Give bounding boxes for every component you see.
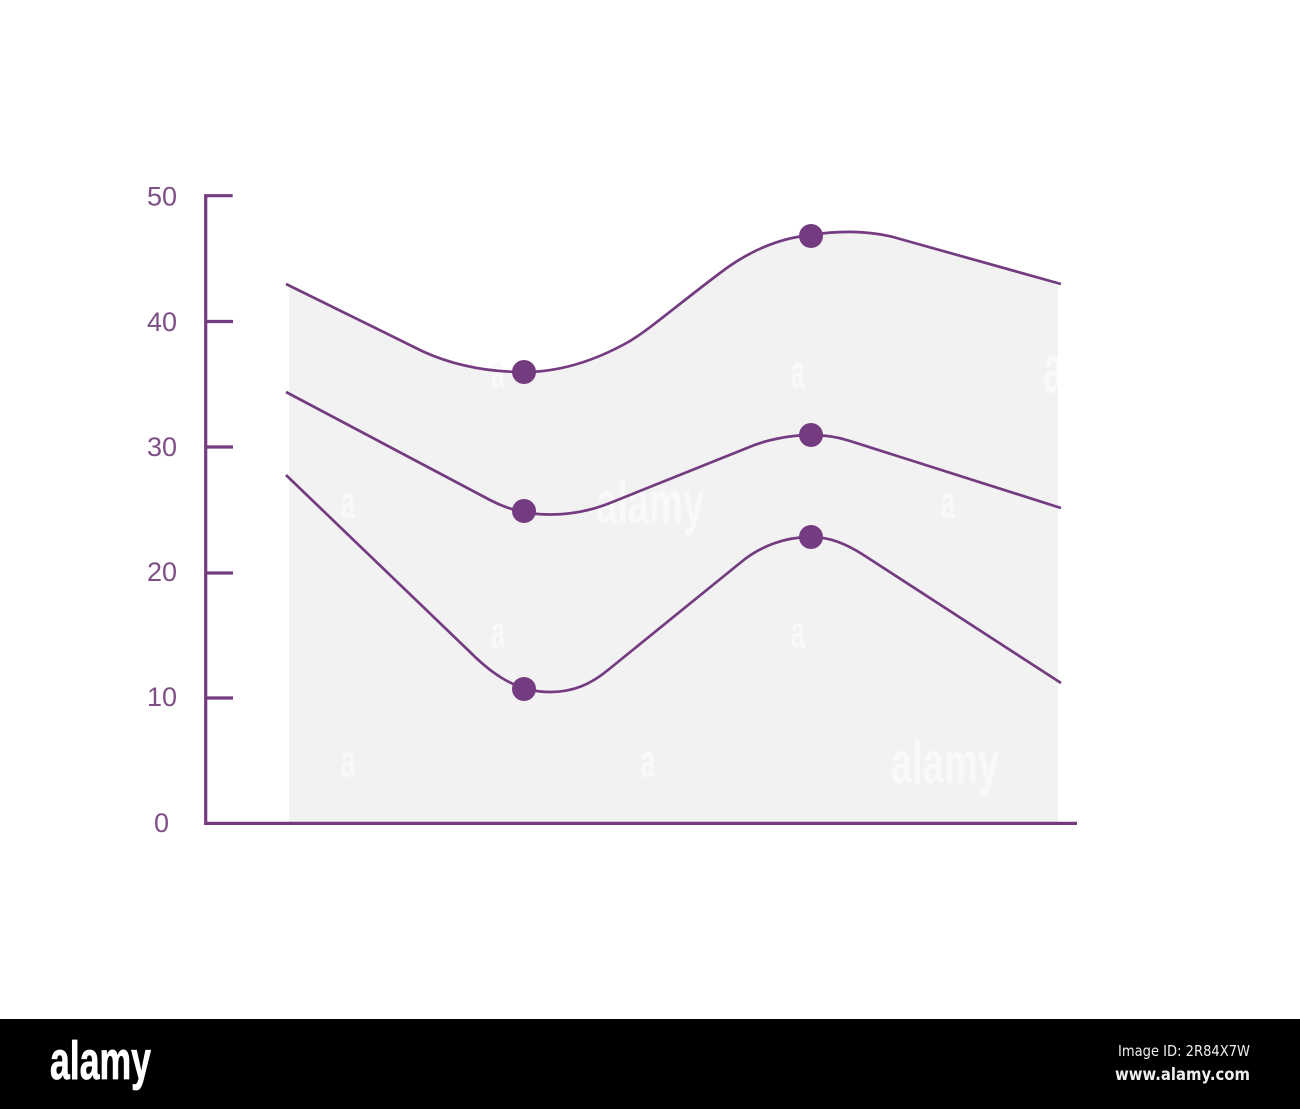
watermark footer bar: Image ID: 2R84X7W <box>1118 1042 1250 1060</box>
watermarks: a <box>341 476 355 528</box>
watermarks: a <box>491 346 505 398</box>
bottom line <box>286 475 1061 692</box>
shaded area <box>289 232 1058 823</box>
y axis labels: 10 <box>147 682 177 712</box>
watermarks: alamy <box>596 470 704 536</box>
watermarks <box>341 330 1065 796</box>
y axis labels: 40 <box>147 307 177 337</box>
watermarks: a <box>791 346 805 398</box>
watermark footer bar <box>0 1019 1300 1109</box>
watermark footer bar: www.alamy.com <box>1115 1065 1250 1085</box>
y axis labels: 50 <box>147 182 177 212</box>
watermarks: a <box>641 735 655 787</box>
data points <box>512 224 823 701</box>
watermarks: a <box>941 476 955 528</box>
watermark footer bar: alamy <box>50 1031 151 1091</box>
white mask right of the shaded area <box>1058 285 1088 822</box>
y axis labels: 30 <box>147 432 177 462</box>
top line <box>286 232 1061 372</box>
y axis labels <box>147 182 177 838</box>
y axis labels: 0 <box>154 808 169 838</box>
watermarks: a <box>341 735 355 787</box>
y axis labels: 20 <box>147 557 177 587</box>
watermarks: alamy <box>891 730 999 796</box>
watermarks: a <box>491 606 505 658</box>
axes <box>205 196 1077 823</box>
watermarks: a <box>1043 330 1065 408</box>
middle line <box>286 392 1061 514</box>
watermarks: a <box>791 606 805 658</box>
